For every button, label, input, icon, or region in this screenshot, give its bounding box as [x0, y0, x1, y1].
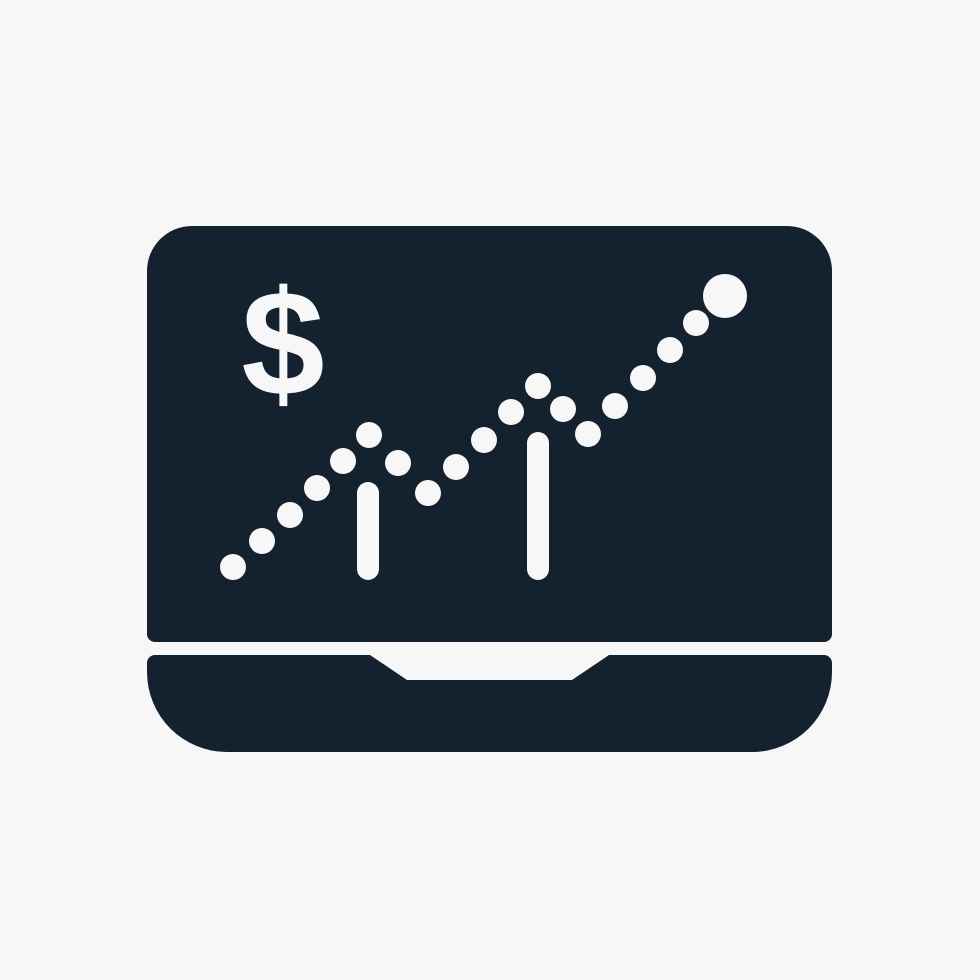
bar 1	[357, 482, 379, 580]
laptop screen	[147, 226, 832, 642]
bar 2	[527, 432, 549, 580]
laptop base	[147, 655, 832, 752]
dollar sign: $	[241, 259, 325, 427]
dotted growth line	[220, 274, 747, 580]
